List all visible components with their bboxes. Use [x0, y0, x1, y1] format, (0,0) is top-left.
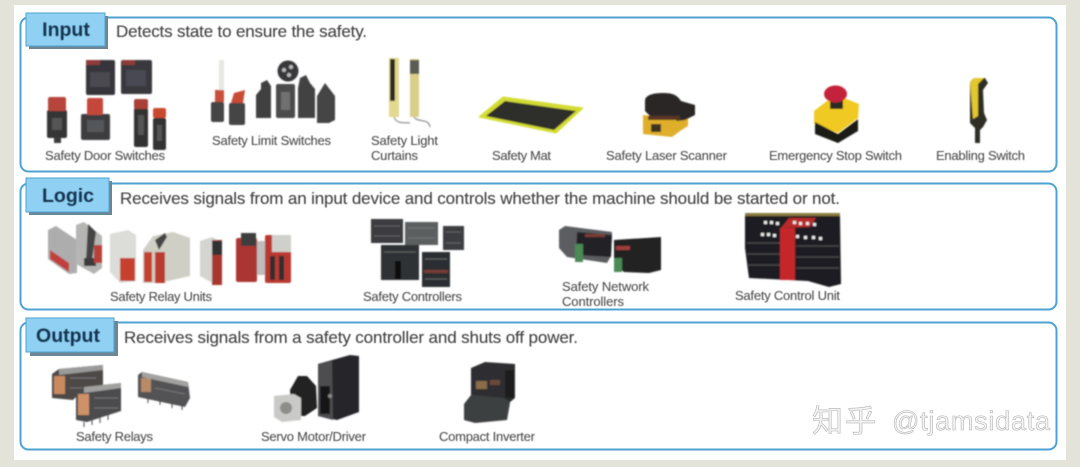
heading tab: Output: Output: [36, 325, 100, 347]
label: safety control unit: Safety Control Unit: [735, 288, 840, 303]
label: compact inverter: Compact Inverter: [439, 429, 536, 444]
icon: servo motor and driver: [274, 355, 359, 422]
icon: safety limit switches: [211, 60, 335, 125]
description: output: Receives signals from a safety controller and shuts off power.: [124, 328, 578, 347]
heading tab: Logic: [26, 178, 112, 215]
label: safety controllers: Safety Controllers: [363, 289, 462, 304]
label: safety limit switches: Safety Limit Switches: [212, 133, 332, 148]
heading tab: Input: [26, 13, 108, 49]
icon: safety relays: [52, 365, 190, 427]
heading tab: Input: Input: [42, 19, 90, 41]
icon: safety controllers: [371, 219, 464, 287]
label: safety relays: Safety Relays: [76, 429, 154, 444]
label: servo motor and driver: Servo Motor/Driver: [261, 429, 367, 444]
label: safety relay units: Safety Relay Units: [110, 289, 212, 304]
watermark: [812, 404, 1051, 439]
label: enabling switch: Enabling Switch: [936, 148, 1025, 163]
label: safety light curtains: [371, 133, 438, 163]
label: safety mat: Safety Mat: [492, 148, 551, 163]
icon: compact inverter: [464, 362, 515, 423]
icon: enabling switch: [970, 78, 988, 143]
icon: safety mat: [479, 97, 583, 133]
label: safety door switches: Safety Door Switches: [45, 148, 166, 163]
label: safety light curtains: Curtains: [371, 148, 418, 163]
icon: safety control unit: [745, 213, 841, 287]
icon: safety relay units: [48, 222, 291, 285]
heading tab: Logic: Logic: [42, 185, 94, 207]
description: logic: Receives signals from an input device and controls whether the machine should be started or not.: [120, 189, 840, 208]
watermark: 知乎: [812, 404, 876, 439]
label: safety network controllers: Safety Network: [562, 279, 650, 294]
watermark: @tjamsidata: [892, 406, 1051, 436]
label: safety light curtains: Safety Light: [371, 133, 438, 148]
label: safety network controllers: Controllers: [562, 294, 624, 309]
label: emergency stop switch: Emergency Stop Switch: [769, 148, 902, 163]
panel: output: [20, 318, 1056, 450]
heading tab: Output: [26, 318, 118, 356]
label: safety network controllers: [562, 279, 650, 309]
icon: safety door switches: [47, 60, 166, 150]
icon: emergency stop switch: [814, 86, 859, 143]
label: safety laser scanner: Safety Laser Scanner: [606, 148, 728, 163]
panel: logic: [20, 178, 1056, 310]
description: input: Detects state to ensure the safety.: [116, 22, 367, 41]
icon: safety laser scanner: [643, 93, 695, 137]
panel: input: [20, 13, 1056, 172]
icon: safety network controllers: [559, 226, 661, 273]
icon: safety light curtains: [389, 58, 430, 127]
